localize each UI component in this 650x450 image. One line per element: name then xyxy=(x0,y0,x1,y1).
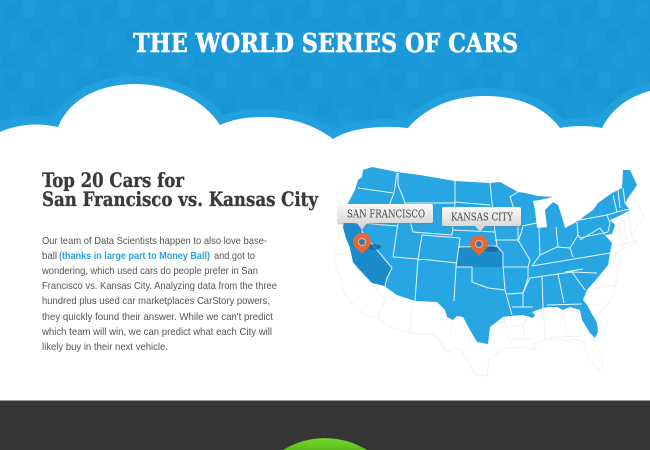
highlighted state: Kansas xyxy=(456,246,503,267)
body text: ball xyxy=(42,250,57,262)
dark footer panel xyxy=(0,400,650,450)
body text: (thanks in large part to Money Ball) xyxy=(59,250,210,262)
body text: Our team of Data Scientists happen to also love base- xyxy=(42,235,267,247)
heading: San Francisco vs. Kansas City xyxy=(42,187,318,211)
callout: Kansas City: KANSAS CITY xyxy=(451,210,513,224)
callout: San Francisco: SAN FRANCISCO xyxy=(347,208,425,220)
body text xyxy=(41,235,277,353)
body text: which team will win, we can predict what each City will xyxy=(41,326,272,338)
callout: Kansas City xyxy=(442,207,522,234)
title: THE WORLD SERIES OF CARS xyxy=(133,29,518,59)
body text: likely buy in their next vehicle. xyxy=(42,341,168,353)
pin: Kansas City xyxy=(470,235,498,256)
heading xyxy=(42,168,318,211)
body text: hundred plus used car marketplaces CarStory powers, xyxy=(42,295,270,307)
callout: San Francisco xyxy=(337,204,434,232)
body text: and got to xyxy=(214,250,255,262)
map: USA blue states xyxy=(343,167,637,344)
header banner with car photo texture xyxy=(0,0,650,145)
state borders xyxy=(345,173,630,315)
pin: San Francisco xyxy=(353,233,381,254)
green circle xyxy=(283,438,367,450)
highlighted state: California xyxy=(343,222,392,286)
body text: they quickly found their answer. While we can't predict xyxy=(42,311,273,323)
body text: Francisco vs. Kansas City. Analyzing data from the three xyxy=(42,280,277,292)
map: ghost outline of USA xyxy=(334,199,644,376)
cloud halo xyxy=(0,84,650,145)
body text: wondering, which used cars do people prefer in San xyxy=(41,265,258,277)
white clouds and content area xyxy=(0,84,650,401)
heading: Top 20 Cars for xyxy=(42,168,184,192)
